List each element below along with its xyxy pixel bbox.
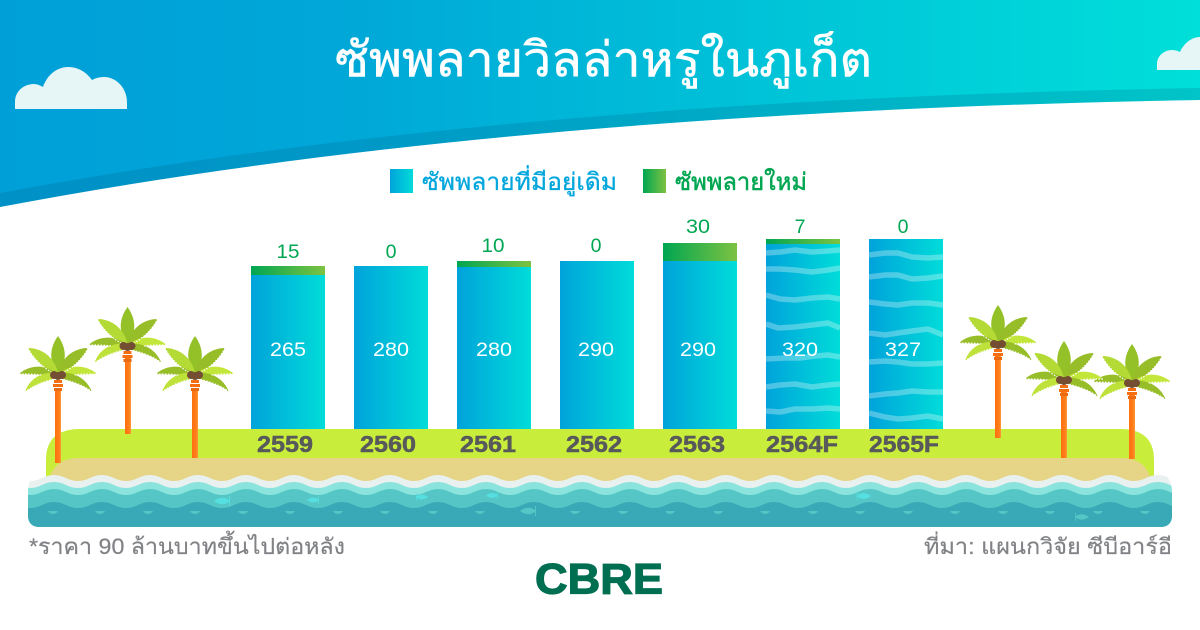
bar 2560: 280 <box>373 339 409 361</box>
legend: ซัพพลายใหม่ <box>675 168 807 196</box>
bar 2561 <box>457 235 531 457</box>
palm left 1 <box>19 336 97 463</box>
bar chart <box>251 216 943 457</box>
bar 2562 <box>560 235 634 457</box>
bar 2560: 2560 <box>360 431 416 457</box>
icon: cloud right <box>1157 37 1200 70</box>
bar 2559: 2559 <box>257 431 313 457</box>
bar 2565F: 0 <box>898 216 909 238</box>
sea waves with fish <box>28 475 1172 527</box>
bar 2561: 2561 <box>460 431 516 457</box>
bar 2563 <box>663 216 737 457</box>
bar 2561: 280 <box>476 339 512 361</box>
bar 2560: 0 <box>386 241 397 263</box>
island sand <box>47 458 1153 490</box>
bar 2559: 15 <box>276 241 300 263</box>
palm left 3 <box>156 336 234 458</box>
bar 2565F: 2565F <box>869 431 939 457</box>
legend <box>390 165 807 197</box>
bar 2565F: 327 <box>885 339 921 361</box>
palm right 1 <box>959 305 1037 438</box>
bar 2559: 265 <box>270 339 306 361</box>
island grass <box>46 429 1154 482</box>
palm right 3 <box>1093 344 1171 459</box>
bar 2559 <box>251 241 325 457</box>
bar 2563: 30 <box>686 216 710 238</box>
bar 2565F <box>869 216 943 457</box>
legend: ซัพพลายที่มีอยู่เดิม <box>422 165 617 197</box>
bar 2563: 2563 <box>669 431 725 457</box>
logo: CBRE: CBRE <box>535 556 663 604</box>
bar 2564F: 320 <box>782 339 818 361</box>
bar 2562: 0 <box>591 235 602 257</box>
footnote: *ราคา 90 ล้านบาทขึ้นไปต่อหลัง <box>29 531 345 559</box>
palm left 2 <box>88 307 166 434</box>
bar 2561: 10 <box>482 235 505 257</box>
bar 2562: 290 <box>578 339 614 361</box>
bar 2564F: 7 <box>795 216 805 238</box>
palm right 2 <box>1025 341 1103 458</box>
bar 2562: 2562 <box>566 431 622 457</box>
icon: cloud left <box>15 67 127 109</box>
bar 2564F <box>766 216 840 457</box>
bar 2564F: 2564F <box>766 431 838 457</box>
title: ซัพพลายวิลล่าหรูในภูเก็ต <box>335 31 872 89</box>
bar 2560 <box>354 241 428 457</box>
bar 2563: 290 <box>680 339 716 361</box>
header banner <box>0 0 1200 207</box>
source: ที่มา: แผนกวิจัย ซีบีอาร์อี <box>924 531 1172 559</box>
